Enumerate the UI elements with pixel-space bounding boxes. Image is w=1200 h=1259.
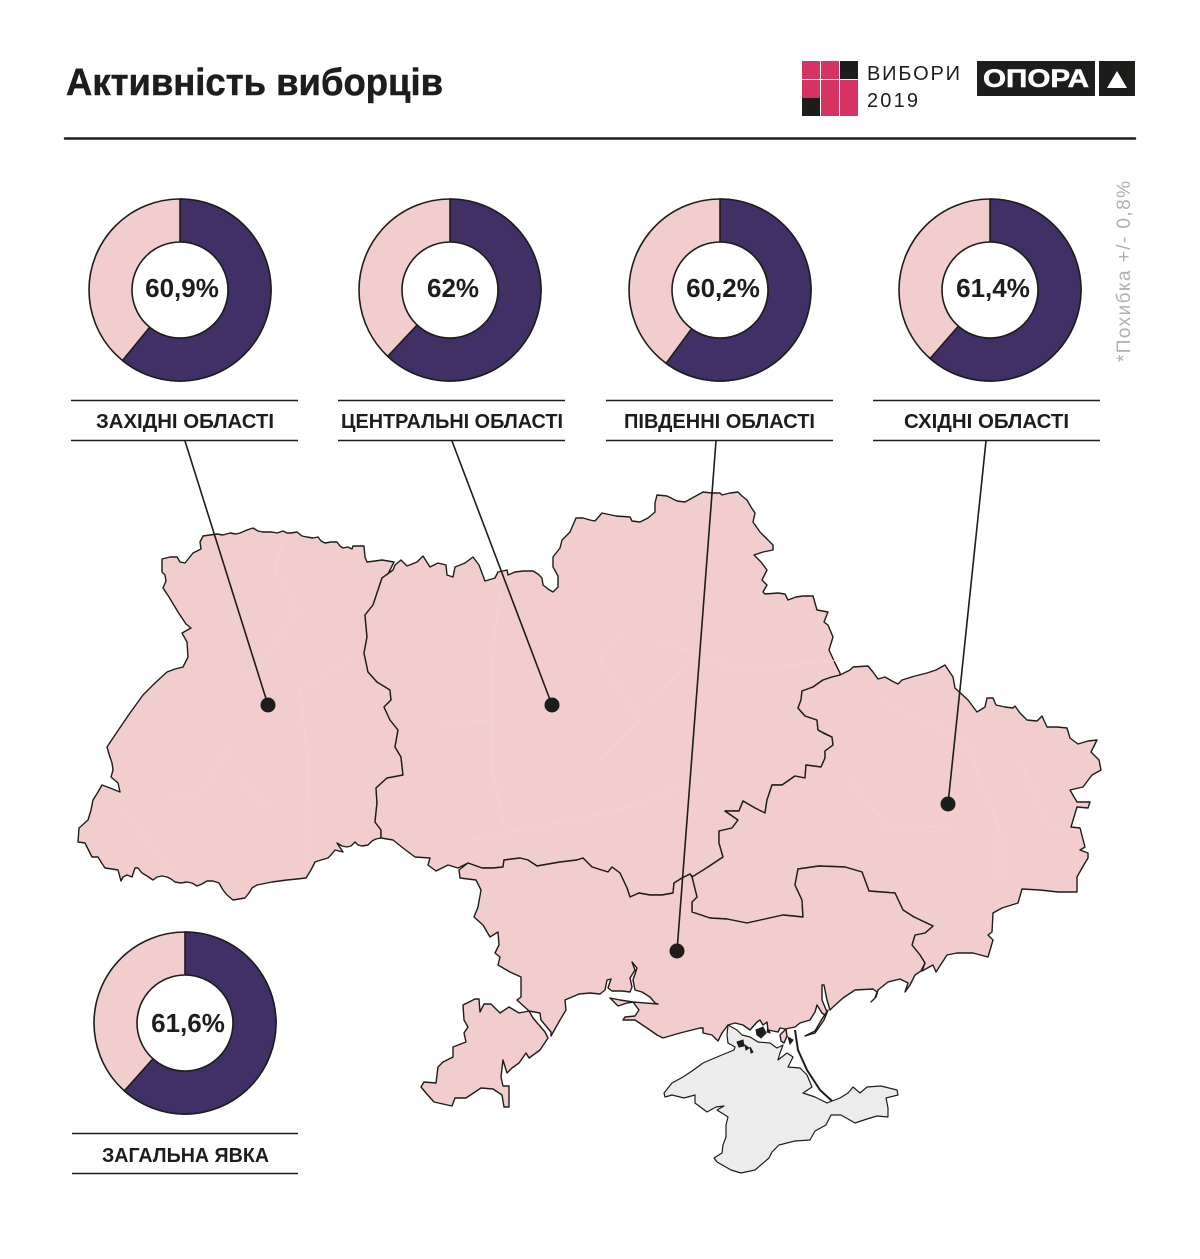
donut: east 61,4% [899,199,1081,381]
label: centre: ЦЕНТРАЛЬНІ ОБЛАСТІ [341,411,563,433]
donut: overall 61,6%: 61,6% [151,1008,225,1038]
map region: Crimea [664,1025,898,1173]
map region: centre [364,492,840,897]
map region: east [692,665,1101,972]
donut: west 60,9% [89,199,271,381]
logo: Вибори 2019: 2019 [867,90,918,112]
Arabat spit [795,1030,832,1101]
donut: overall 61,6% [94,932,276,1114]
title: Активність виборців [66,62,443,104]
Sivash shoreline fragments [737,1026,793,1053]
label: west: ЗАХІДНІ ОБЛАСТІ [96,411,274,433]
donut: south 60,2% [629,199,811,381]
callout: south [670,441,716,958]
map of Ukraine [78,492,1101,1173]
donut: centre 62% [359,199,541,381]
label: overall: ЗАГАЛЬНА ЯВКА [102,1145,269,1167]
map region: west [78,528,403,900]
logo: Опора [977,61,1135,96]
donut: east 61,4%: 61,4% [956,273,1030,303]
callout: west [185,441,276,712]
header rule [65,137,1135,140]
logo: Вибори 2019 [802,61,960,116]
label: south: ПІВДЕННІ ОБЛАСТІ [624,411,815,433]
donut: centre 62%: 62% [427,273,479,303]
logo: Опора: ОПОРА [983,65,1089,93]
logo: Вибори 2019: ВИБОРИ [867,63,960,85]
donut: west 60,9%: 60,9% [145,273,219,303]
callout: centre [452,441,560,712]
callout: east [940,441,986,812]
map region: south [459,858,933,1043]
donut: south 60,2%: 60,2% [686,273,760,303]
margin-of-error note: *Похибка +/- 0,8% [1114,181,1135,362]
map region: Odesa south-west [421,999,548,1107]
label: east: СХІДНІ ОБЛАСТІ [904,411,1069,433]
